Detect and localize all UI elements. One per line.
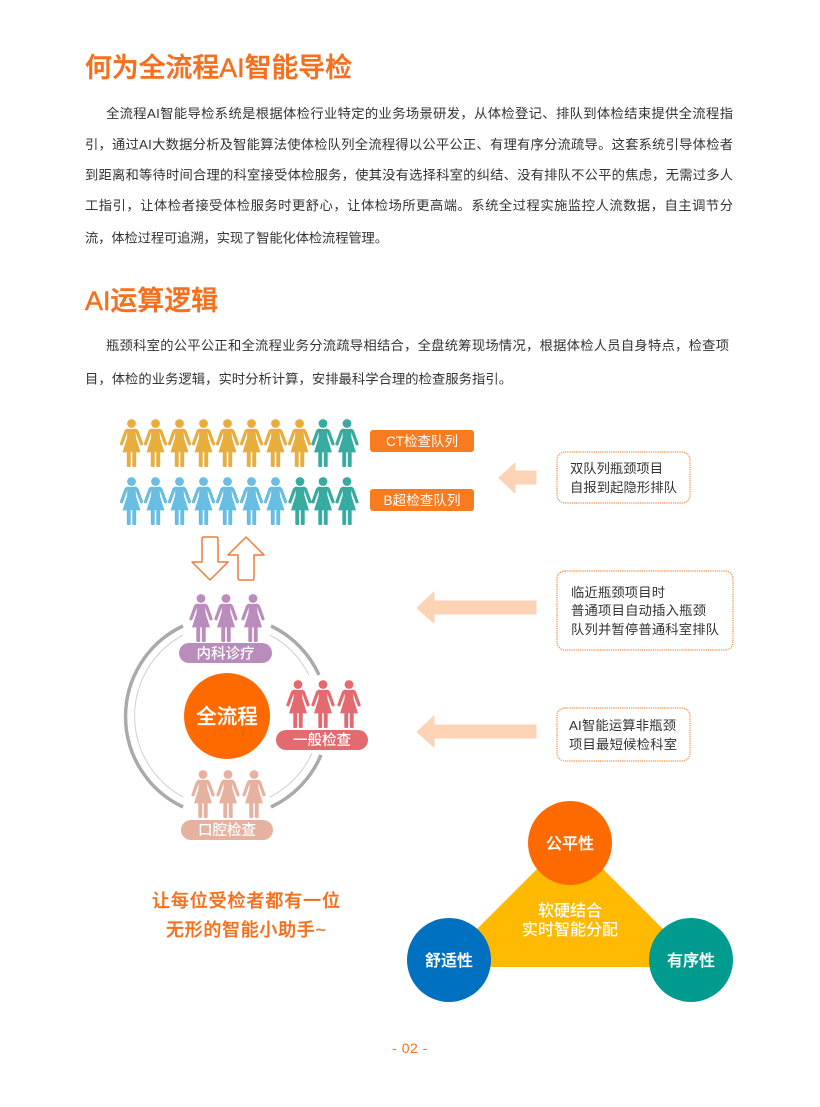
text block: AI logic paragraph	[85, 337, 729, 386]
text block: AI logic paragraph: 目，体检的业务逻辑，实时分析计算，安排最科学合理的检查服务指引。	[85, 372, 512, 386]
callout: near bottleneck: 普通项目自动插入瓶颈	[571, 603, 706, 618]
text block: AI logic paragraph: 瓶颈科室的公平公正和全流程业务分流疏导相结合，全盘统筹现场情况，根据体检人员自身特点，检查项	[106, 337, 729, 353]
triangle diagram: 实时智能分配	[522, 920, 618, 939]
people row: ultrasound queue	[122, 477, 357, 525]
text block: intro paragraph: 工指引，让体检者接受体检服务时更舒心，让体检场所更高端。系统全过程实施监控人流数据，自主调节分	[85, 197, 733, 213]
triangle diagram: 公平性	[546, 835, 594, 853]
group: dental exam: 口腔检查	[198, 821, 256, 839]
group: dental exam	[181, 770, 273, 840]
center circle: full process	[184, 673, 270, 759]
callout: dual queue: 自报到起隐形排队	[570, 480, 677, 495]
slogan: 无形的智能小助手~	[166, 920, 326, 940]
page number: - 02 -	[392, 1040, 428, 1056]
center circle: full process: 全流程	[196, 706, 258, 728]
text block: intro paragraph: 到距离和等待时间合理的科室接受体检服务，使其没有选择科室的纠结、没有排队不公平的焦虑，无需过多人	[85, 166, 733, 182]
heading: AI logic: AI运算逻辑	[85, 286, 218, 316]
label: CT queue: CT检查队列	[386, 434, 458, 449]
callout: near bottleneck: 临近瓶颈项目时	[571, 585, 665, 600]
callout: near bottleneck: 队列并暂停普通科室排队	[571, 621, 719, 637]
group: internal medicine: 内科诊疗	[196, 646, 254, 662]
label: CT queue	[370, 430, 474, 452]
group: internal medicine	[179, 594, 272, 663]
group: general exam: 一般检查	[293, 731, 351, 749]
triangle diagram: 有序性	[667, 952, 715, 970]
slogan	[152, 890, 340, 940]
callout: shortest wait: AI智能运算非瓶颈	[569, 718, 676, 733]
people row: CT queue	[122, 419, 357, 467]
callout: dual queue: 双队列瓶颈项目	[570, 461, 663, 476]
icon: up arrow	[228, 537, 264, 580]
text block: intro paragraph: 全流程AI智能导检系统是根据体检行业特定的业务场景研发，从体检登记、排队到体检结束提供全流程指	[106, 105, 733, 121]
callout: dual queue	[557, 452, 690, 503]
arrow: to dual queue note	[499, 463, 536, 493]
slogan: 让每位受检者都有一位	[152, 890, 340, 911]
callout: shortest wait	[557, 708, 690, 761]
triangle diagram: 软硬结合	[538, 902, 602, 920]
icon: down arrow	[192, 537, 228, 580]
arrow: to shortest wait note	[417, 716, 536, 747]
group: general exam	[276, 680, 368, 750]
text block: intro paragraph: 流，体检过程可追溯，实现了智能化体检流程管理。	[85, 230, 388, 246]
arrow: to bottleneck note	[417, 592, 536, 623]
label: ultrasound queue	[370, 489, 474, 511]
heading: what is full-process AI guidance: 何为全流程AI智能导检	[85, 53, 352, 83]
triangle diagram	[407, 801, 733, 1002]
ring: process cycle	[126, 626, 321, 807]
label: ultrasound queue: B超检查队列	[384, 493, 460, 508]
text block: intro paragraph: 引，通过AI大数据分析及智能算法使体检队列全流程得以公平公正、有理有序分流疏导。这套系统引导体检者	[85, 136, 733, 152]
triangle diagram: 舒适性	[425, 952, 473, 970]
callout: near bottleneck	[557, 571, 733, 650]
callout: shortest wait: 项目最短候检科室	[569, 736, 677, 752]
text block: intro paragraph	[85, 105, 733, 246]
